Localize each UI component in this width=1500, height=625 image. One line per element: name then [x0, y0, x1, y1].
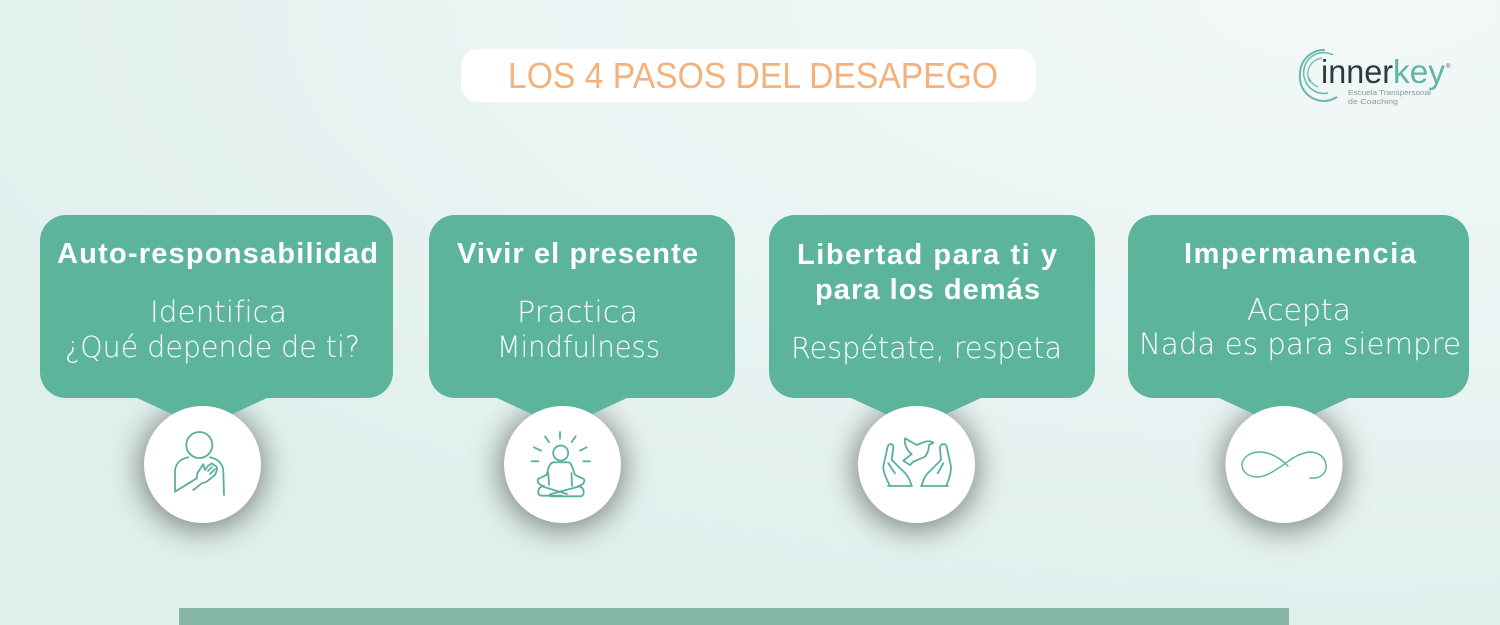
panel: vivir el presente — [429, 215, 735, 530]
bubble 3 — [769, 215, 1095, 428]
body 2: Mindfulness — [497, 330, 660, 364]
icon: hand on heart — [175, 432, 224, 495]
body 2 — [497, 295, 660, 364]
panel: libertad — [769, 215, 1095, 530]
panel: auto-responsabilidad — [40, 215, 393, 530]
icon circle 3 — [858, 406, 975, 523]
bubble 4 — [1128, 215, 1469, 428]
icon: infinity — [1242, 452, 1326, 478]
heading 3 — [797, 239, 1057, 306]
body 1 — [65, 295, 360, 364]
panel: impermanencia — [1128, 215, 1469, 530]
heading 1: Auto-responsabilidad — [57, 238, 378, 270]
body 4: Acepta — [1247, 293, 1351, 327]
body 2: Practica — [517, 295, 638, 329]
icon circle 2 — [504, 406, 621, 523]
body 4 — [1139, 293, 1461, 361]
heading 2: Vivir el presente — [457, 238, 698, 270]
body 3: Respétate, respeta — [791, 331, 1062, 365]
heading 4: Impermanencia — [1184, 238, 1417, 270]
icon circle 4 — [1226, 406, 1342, 523]
logo: innerkey: Escuela Transpersonal — [1348, 88, 1431, 97]
bottom bar — [179, 608, 1289, 625]
icon: hands and dove — [883, 438, 951, 486]
heading 3: Libertad para ti y — [797, 239, 1057, 271]
body 1: ¿Qué depende de ti? — [65, 330, 360, 364]
heading 3: para los demás — [815, 274, 1040, 306]
icon: meditating person — [532, 432, 590, 496]
body 1: Identifica — [150, 295, 287, 329]
icon circle 1 — [144, 406, 261, 523]
title: LOS 4 PASOS DEL DESAPEGO — [508, 55, 998, 96]
bubble 2 — [429, 215, 735, 428]
logo: innerkey — [1300, 50, 1451, 106]
logo: innerkey: inner — [1321, 53, 1393, 90]
logo: innerkey: de Coaching — [1348, 97, 1398, 106]
bubble 1 — [40, 215, 393, 428]
logo: innerkey: key — [1393, 53, 1445, 90]
body 4: Nada es para siempre — [1139, 327, 1461, 361]
logo: innerkey: ® — [1446, 63, 1451, 70]
